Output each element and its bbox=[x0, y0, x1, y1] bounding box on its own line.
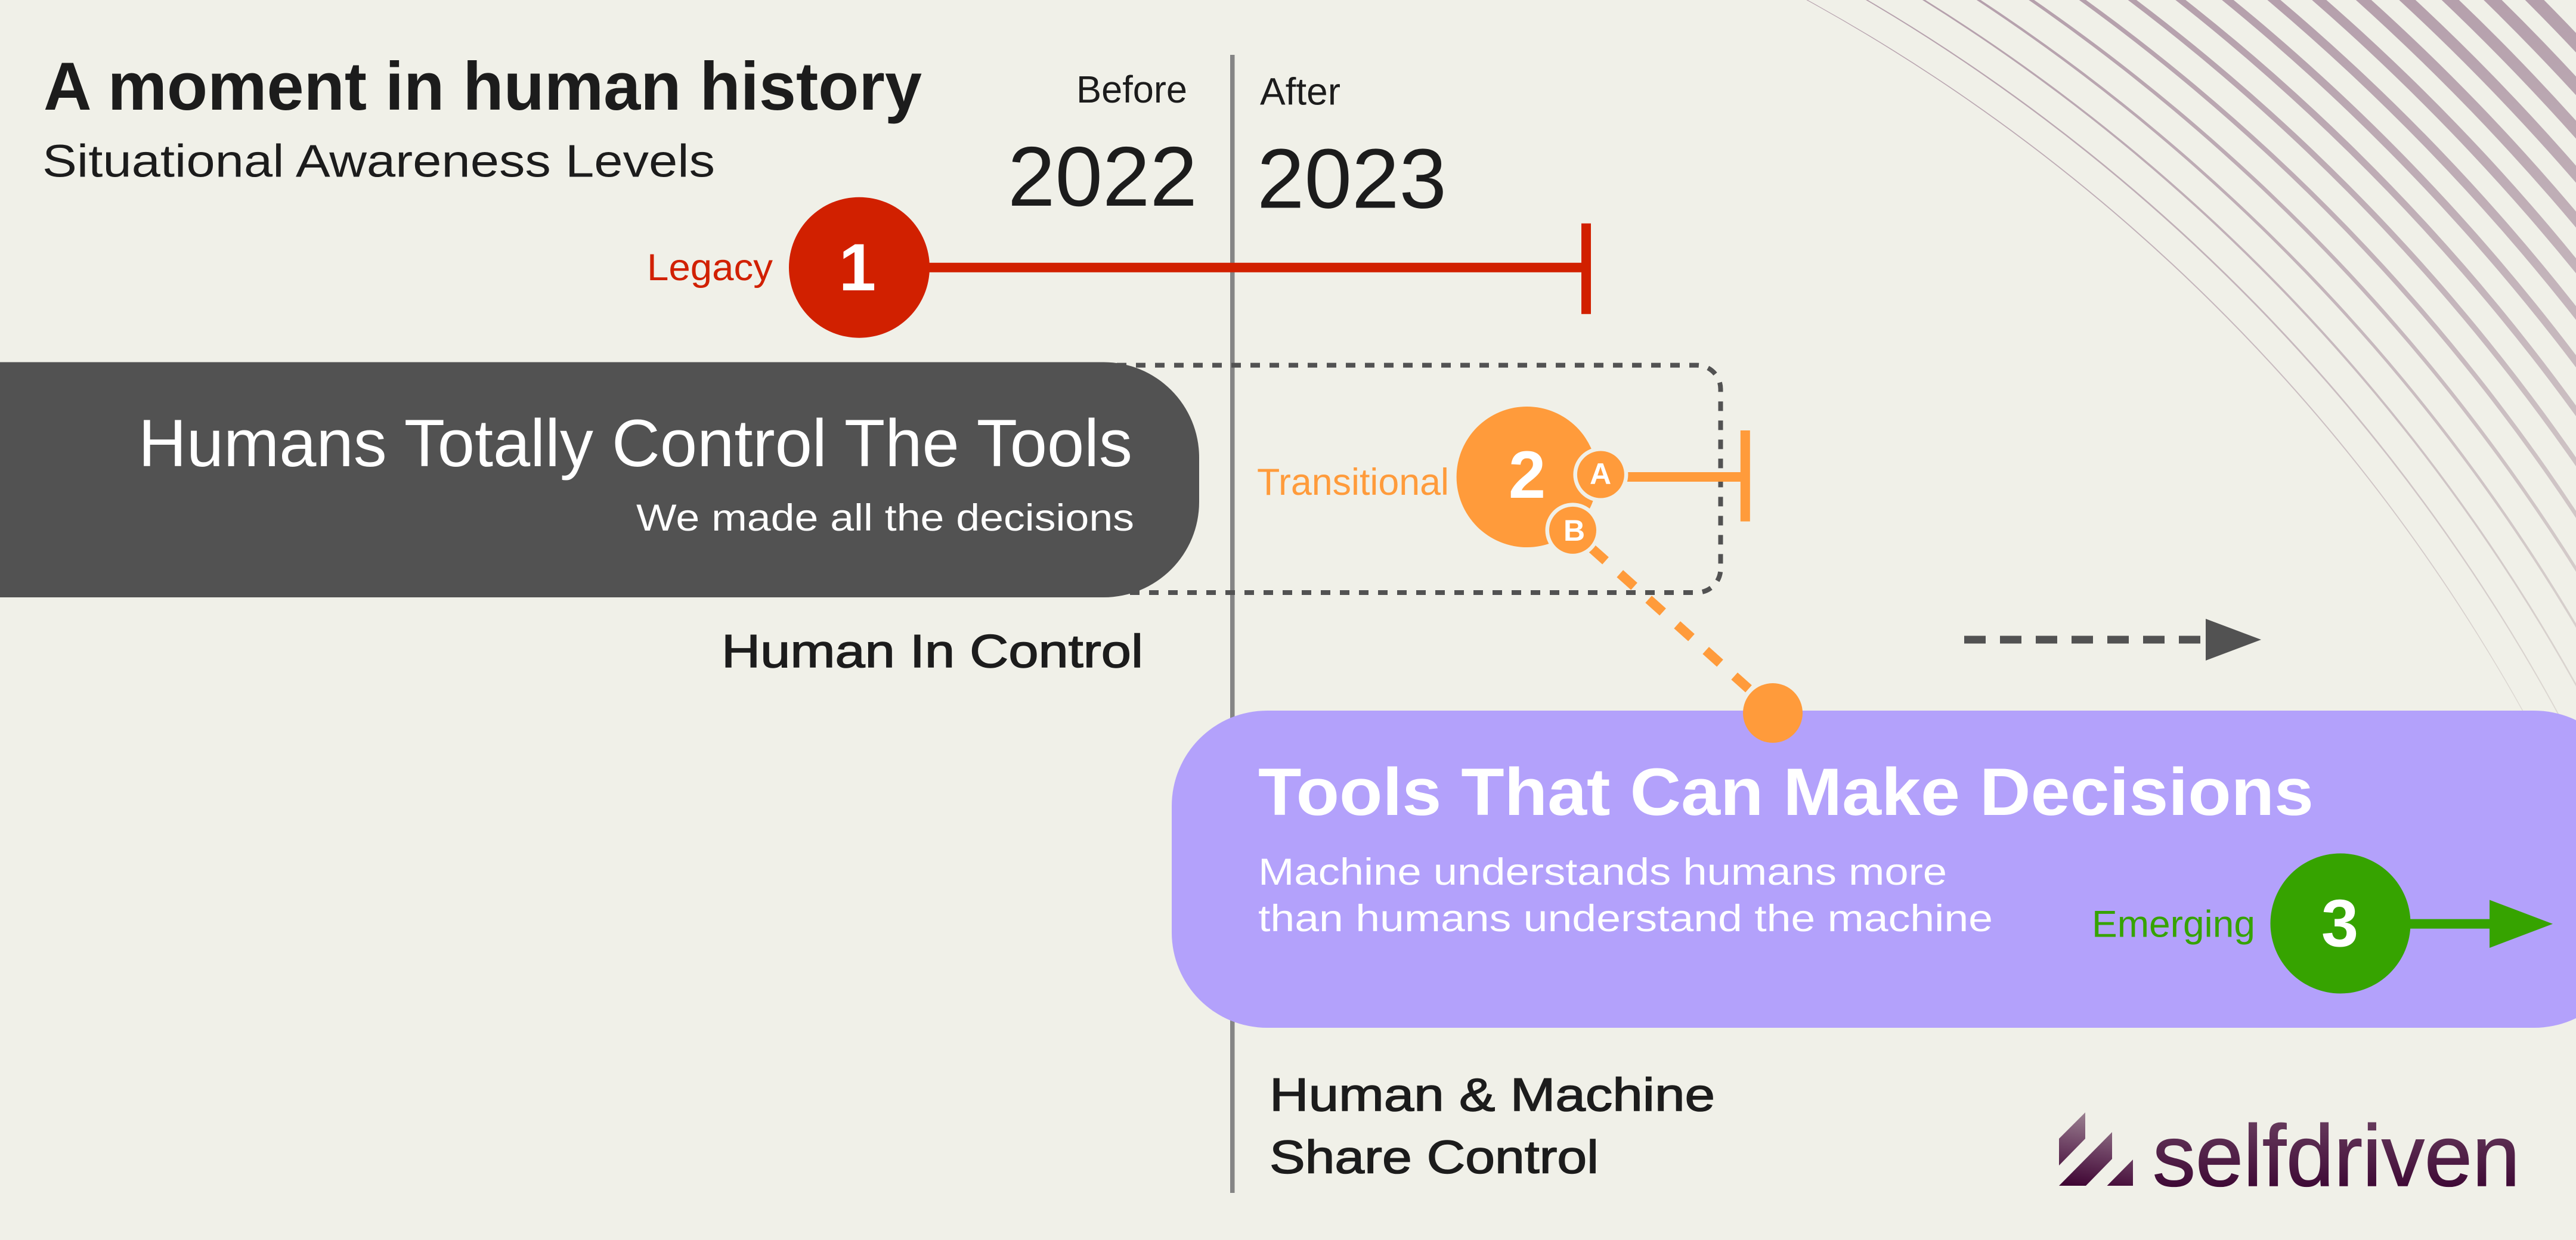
line to end stop for A bbox=[1627, 430, 1745, 522]
label: human in control: Human In Control bbox=[722, 625, 1143, 677]
panel text bbox=[1258, 851, 1993, 940]
level 2: transitional bbox=[1257, 407, 1765, 703]
label: after: After bbox=[1260, 70, 1340, 113]
label: human and machine share control bbox=[1270, 1068, 1715, 1183]
logo wordmark: selfdriven bbox=[2153, 1107, 2520, 1204]
badge A: A bbox=[1590, 457, 1611, 491]
subtitle: Situational Awareness Levels bbox=[42, 136, 715, 187]
panel text: than humans understand the machine bbox=[1258, 898, 1993, 940]
logo mark bbox=[2059, 1112, 2133, 1186]
transitional label: Transitional bbox=[1257, 461, 1449, 503]
timeline divider bbox=[1230, 55, 1234, 1193]
number badge 3 bbox=[2271, 854, 2410, 993]
emerging label: Emerging bbox=[2092, 904, 2255, 946]
emerging arrow bbox=[2385, 900, 2553, 948]
panel heading: Tools That Can Make Decisions bbox=[1258, 755, 2314, 829]
number badge 3: 3 bbox=[2321, 886, 2358, 960]
label: before: Before bbox=[1076, 68, 1187, 111]
junction dot bbox=[1743, 683, 1803, 743]
dotted box: transitional zone bbox=[1111, 365, 1721, 593]
badge B bbox=[1546, 503, 1600, 557]
panel text: We made all the decisions bbox=[636, 497, 1134, 539]
level 1: legacy bbox=[647, 197, 1586, 338]
legacy number badge bbox=[789, 197, 930, 338]
number badge 2: 2 bbox=[1509, 438, 1546, 512]
logo: selfdriven bbox=[2059, 1107, 2520, 1204]
label: human and machine share control: Share Control bbox=[1270, 1130, 1599, 1183]
legacy label: Legacy bbox=[647, 247, 773, 289]
dashed arrow bbox=[1964, 619, 2261, 661]
panel heading: Humans Totally Control The Tools bbox=[138, 406, 1132, 480]
dashed path from B to panel bbox=[1592, 548, 1765, 703]
year 2022: 2022 bbox=[1008, 129, 1197, 224]
panel text: Machine understands humans more bbox=[1258, 851, 1947, 893]
legacy line with end stop bbox=[894, 224, 1586, 314]
legacy number badge: 1 bbox=[839, 230, 876, 305]
label: human and machine share control: Human & Machine bbox=[1270, 1068, 1715, 1121]
title: A moment in human history bbox=[44, 49, 922, 125]
level 3: emerging bbox=[2092, 854, 2553, 993]
badge B: B bbox=[1563, 514, 1585, 547]
number badge 2 bbox=[1457, 407, 1597, 547]
panel: tools that can make decisions bbox=[1172, 711, 2576, 1028]
badge A bbox=[1573, 447, 1628, 502]
year 2023: 2023 bbox=[1257, 131, 1447, 227]
panel: humans totally control the tools bbox=[0, 362, 1199, 597]
